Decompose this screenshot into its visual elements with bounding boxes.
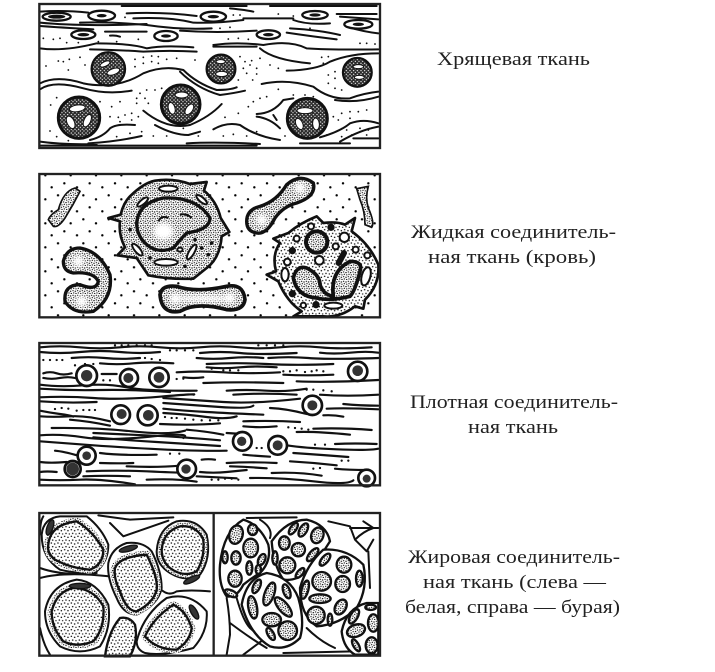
divider — [210, 513, 217, 656]
caption: dense connective tissue: Плотная соединитель- — [410, 392, 618, 413]
brown fat droplets — [222, 521, 379, 653]
isogenous chondrocyte groups — [58, 52, 372, 138]
white fat cell, center — [108, 543, 162, 615]
leukocyte with nucleus, upper left — [108, 180, 229, 279]
red cell, dumbbell lower — [160, 286, 245, 312]
white fat cell, upper right — [157, 521, 208, 578]
small platelet left — [48, 188, 80, 227]
red cell, C-shaped — [63, 248, 110, 312]
fibrocyte nuclei — [66, 365, 371, 483]
small dots between fibers — [43, 345, 348, 480]
plasma dots — [39, 174, 380, 317]
collagen fibers — [40, 346, 378, 484]
panel: dense connective tissue — [39, 343, 380, 486]
white fat cell, bottom — [105, 618, 136, 656]
brown fat cells — [220, 520, 378, 655]
caption: liquid connective tissue — [411, 222, 616, 268]
caption: adipose connective tissue: белая, справа — бурая) — [405, 597, 620, 618]
platelet, dumbbell upper — [247, 178, 314, 233]
frame — [39, 343, 380, 485]
frame — [39, 4, 380, 148]
panel: adipose tissue — [39, 513, 380, 656]
white fat cell, lower right — [137, 596, 207, 654]
panel: cartilage tissue — [39, 4, 380, 148]
white fat cell, upper left — [42, 516, 108, 573]
small platelet right — [357, 186, 373, 227]
caption: adipose connective tissue: ная ткань (слева — — [423, 572, 607, 593]
cartilage fibers — [40, 6, 378, 146]
caption: cartilage tissue: Хрящевая ткань — [437, 49, 590, 70]
caption: dense connective tissue — [410, 392, 618, 438]
caption: adipose connective tissue: Жировая соединитель- — [408, 547, 620, 568]
lacunae — [65, 60, 364, 131]
caption: liquid connective tissue: ная ткань (кровь) — [428, 247, 596, 268]
caption: liquid connective tissue: Жидкая соединитель- — [411, 222, 616, 243]
lens-shaped cells, upper layer — [43, 11, 372, 41]
frame — [39, 513, 380, 656]
matrix dots — [43, 14, 375, 141]
white fat cell, lower left — [45, 580, 109, 651]
caption: dense connective tissue: ная ткань — [468, 417, 558, 438]
caption: adipose connective tissue — [405, 547, 620, 618]
connective fibers — [40, 515, 378, 655]
white fat cell nuclei — [44, 519, 201, 620]
frame — [39, 174, 380, 317]
panel: blood — [39, 174, 380, 317]
granulocyte, right — [267, 216, 378, 317]
fibrocytes — [65, 362, 375, 486]
